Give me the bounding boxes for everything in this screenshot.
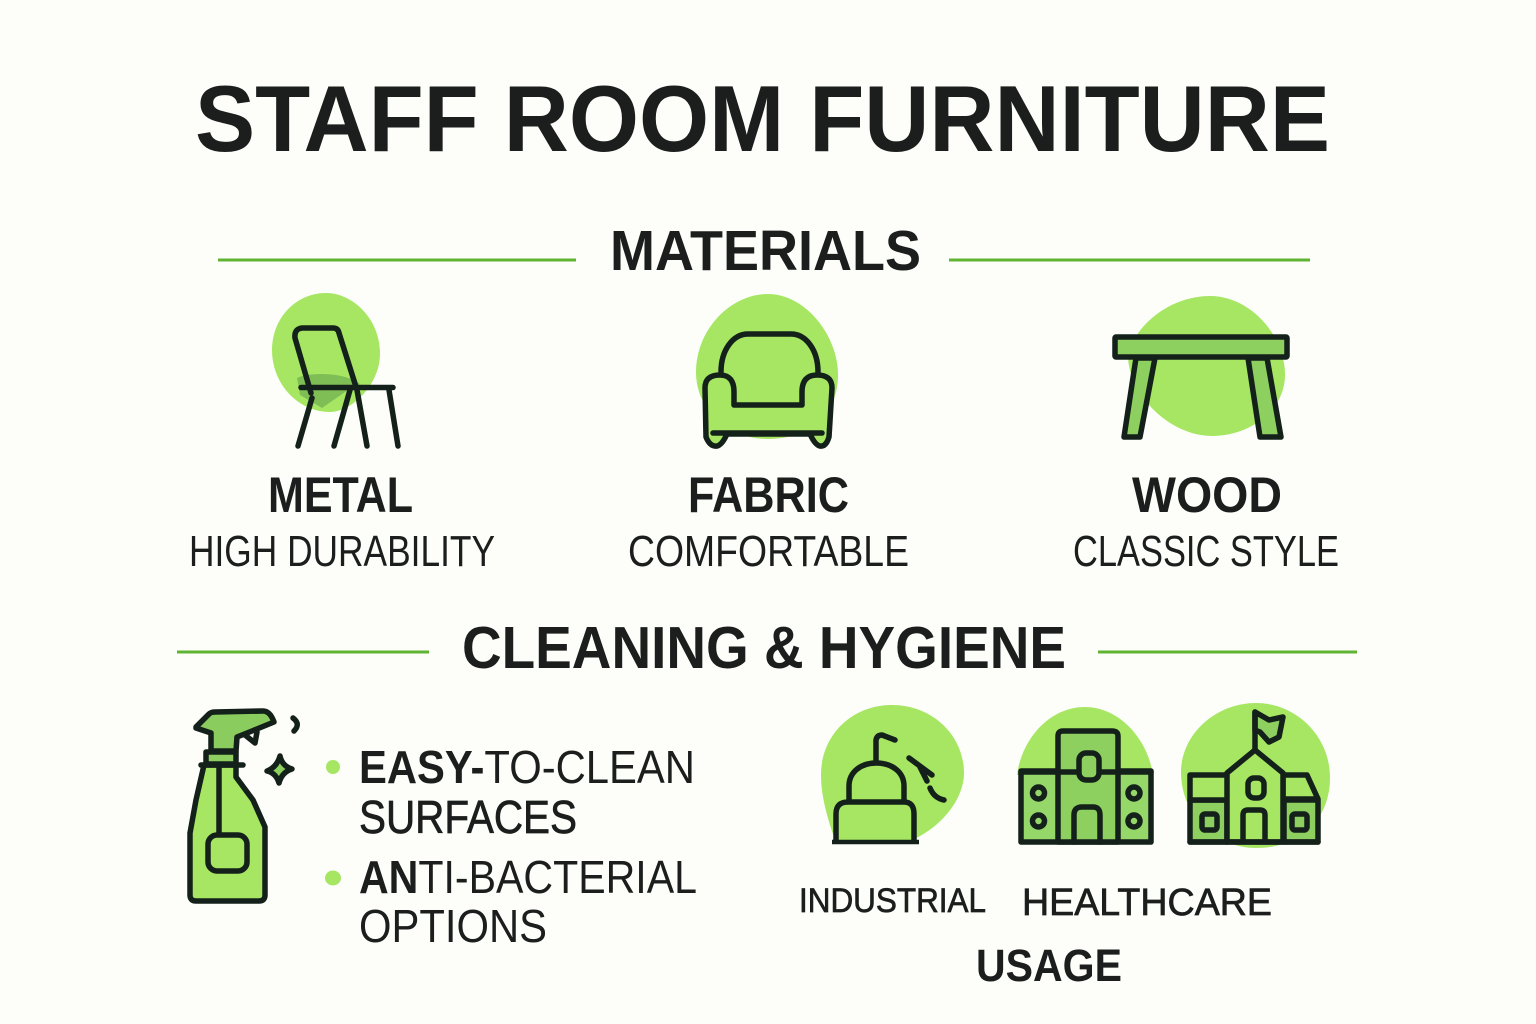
bullet: easy-to-clean surfaces [326,741,695,843]
label: industrial: INDUSTRIAL [799,882,986,920]
panel: materials [189,219,1339,576]
panel: cleaning and hygiene [177,615,1357,952]
label: usage: USAGE [976,940,1122,991]
icon: metal chair [272,293,398,446]
label: healthcare: HEALTHCARE [1022,882,1272,924]
icon: fabric armchair [696,294,838,446]
panel: usage [799,703,1330,991]
bullet: anti-bacterial options [325,851,697,952]
bullet list [325,741,697,952]
label: fabric: FABRIC [688,467,849,523]
heading: cleaning and hygiene: CLEANING & HYGIENE [462,615,1066,681]
label: metal: METAL [268,467,413,523]
text: comfortable: COMFORTABLE [628,527,909,576]
label: wood: WOOD [1132,467,1282,523]
icon: industrial [821,705,964,842]
icon: wood table [1115,296,1287,437]
icon: healthcare building [1017,707,1153,842]
icon: spray bottle [190,711,297,901]
text: classic style: CLASSIC STYLE [1073,527,1339,576]
bullet: anti-bacterial options: OPTIONS [359,900,547,952]
bullet: easy-to-clean surfaces: EASY-TO-CLEAN [359,741,695,793]
title: STAFF ROOM FURNITURE [195,66,1330,171]
text: high durability: HIGH DURABILITY [189,527,495,576]
icon: school building [1181,703,1330,848]
heading: materials: MATERIALS [610,219,921,283]
bullet: anti-bacterial options: ANTI-BACTERIAL [359,851,697,903]
bullet: easy-to-clean surfaces: SURFACES [359,791,577,843]
